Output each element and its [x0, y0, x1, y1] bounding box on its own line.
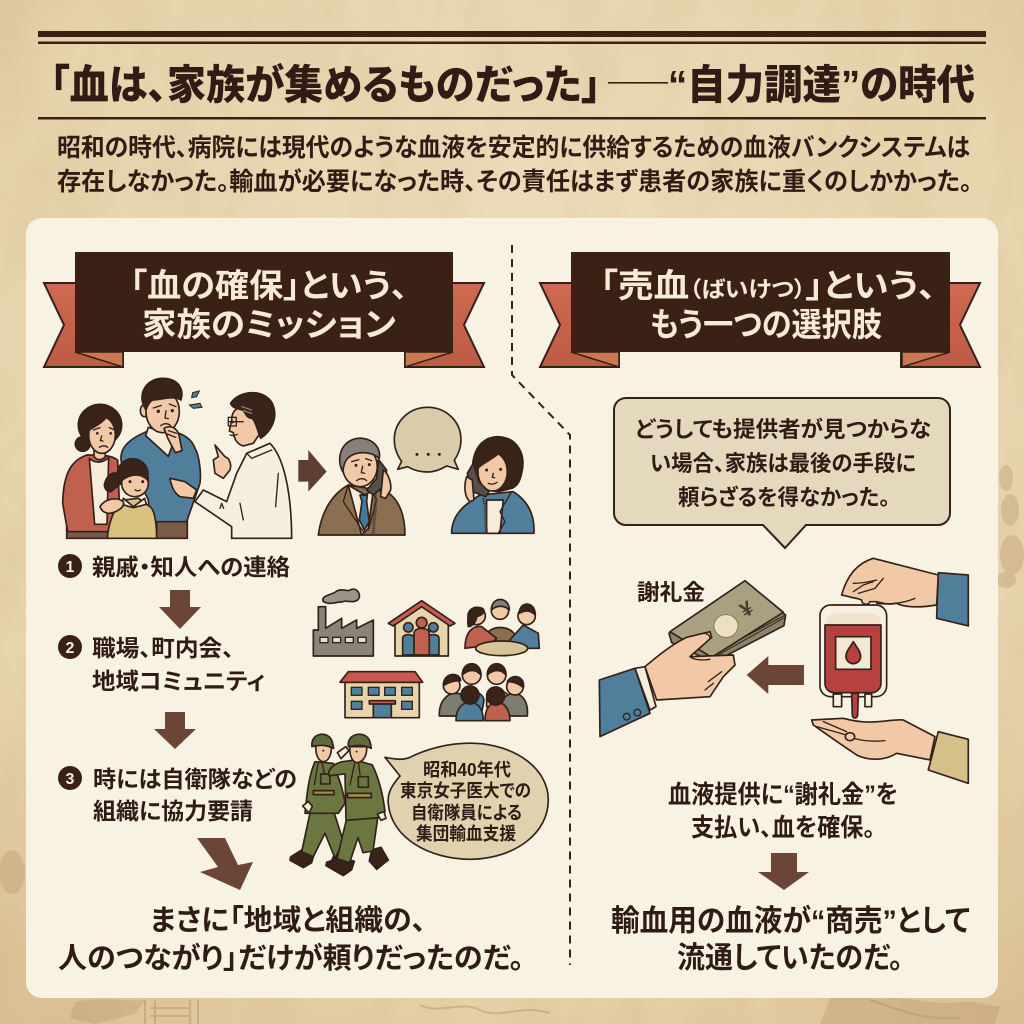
man — [121, 378, 202, 538]
banner: family mission: 「血の確保」という、 — [130, 267, 408, 304]
soldier rear — [290, 734, 347, 868]
callout: Showa 40s blood drive: 自衛隊員による — [411, 803, 522, 823]
money stack: ¥ — [736, 596, 758, 622]
big diagonal arrow — [197, 838, 253, 890]
child — [100, 459, 157, 538]
intro text — [57, 134, 972, 196]
community house — [388, 601, 455, 656]
school building — [340, 672, 423, 718]
banner: family mission — [44, 252, 484, 367]
donor hand above — [842, 558, 968, 626]
step 2: 職場、町内会、 — [92, 635, 234, 661]
soldier saluting — [326, 734, 388, 876]
step 3: 組織に協力要請 — [93, 798, 253, 824]
step 2 — [58, 635, 265, 694]
conclusion right — [611, 904, 970, 975]
woman — [63, 404, 122, 538]
callout: Showa 40s blood drive: 集団輸血支援 — [416, 824, 516, 844]
step 2: 地域コミュニティ — [92, 668, 265, 694]
arrow down 1 — [159, 590, 201, 629]
callout: Showa 40s blood drive: 昭和40年代 — [423, 759, 511, 780]
speech box: last resort: どうしても提供者が見つからな — [635, 417, 931, 442]
hand with money — [599, 632, 735, 737]
woman on phone — [452, 437, 534, 533]
arrow left — [747, 656, 804, 694]
title block — [38, 31, 986, 120]
factory — [313, 589, 373, 656]
speech box: last resort: 頼らざるを得なかった。 — [678, 485, 890, 510]
icons: community organisations and soldiers — [290, 589, 548, 876]
text: paying reward: 血液提供に“謝礼金”を — [668, 781, 898, 809]
step 3: 3 — [66, 771, 75, 788]
step 1: 1 — [66, 559, 75, 576]
arrow down right — [758, 853, 809, 890]
label: reward money: 謝礼金 — [637, 580, 705, 605]
speech box: last resort: い場合、家族は最後の手段に — [650, 451, 916, 476]
banner: another option — [540, 252, 980, 367]
illustration: family talks with doctor, then phone calls — [63, 378, 534, 538]
conclusion right: 流通していたのだ。 — [677, 942, 903, 975]
step 2: 2 — [66, 640, 75, 657]
conclusion left: 人のつながり」だけが頼りだったのだ。 — [58, 941, 524, 975]
intro text: 昭和の時代、病院には現代のような血液を安定的に供給するための血液バンクシステムは — [57, 134, 970, 162]
step 3: 時には自衛隊などの — [93, 766, 297, 792]
money stack — [669, 581, 786, 662]
banner: family mission: 家族のミッション — [142, 306, 396, 343]
speech box: last resort — [614, 398, 950, 548]
conclusion right: 輸血用の血液が“商売”として — [611, 904, 970, 938]
text: paying reward — [668, 781, 898, 842]
main panel — [26, 218, 998, 998]
meeting table — [465, 599, 539, 656]
callout bubble shape — [385, 743, 548, 859]
speech bubble — [394, 407, 461, 472]
illustration: money for blood bag — [599, 558, 968, 783]
arrow down 2 — [154, 712, 196, 749]
arrow — [298, 450, 327, 492]
older man on phone — [318, 438, 405, 535]
callout: Showa 40s blood drive: 東京女子医大での — [400, 781, 531, 801]
intro text: 存在しなかった。輸血が必要になった時、その責任はまず患者の家族に重くのしかかった。 — [57, 167, 972, 196]
doctor — [170, 393, 292, 538]
dashed divider — [512, 245, 570, 965]
callout: Showa 40s blood drive — [400, 759, 531, 844]
step 1: 親戚・知人への連絡 — [92, 554, 290, 580]
group of people — [439, 664, 527, 721]
banner: another option: 「売血 （ばいけつ） 」という、 — [600, 267, 936, 304]
step 3 — [58, 766, 297, 824]
conclusion left: まさに「地域と組織の、 — [150, 904, 426, 937]
banner: another option: もう一つの選択肢 — [650, 306, 882, 343]
title block: “自力調達”の時代 — [668, 62, 975, 108]
blood bag — [820, 605, 887, 718]
title block: 「血は、家族が集めるものだった」 — [50, 62, 601, 108]
receiving hand below — [812, 718, 968, 783]
text: paying reward: 支払い、血を確保。 — [691, 814, 875, 842]
conclusion left — [58, 904, 524, 975]
